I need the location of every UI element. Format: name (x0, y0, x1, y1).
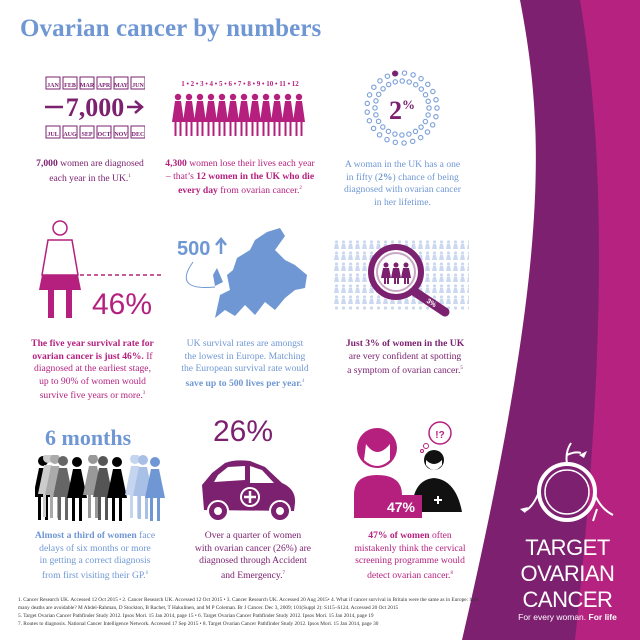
icon: calendar months: JUL (47, 132, 59, 138)
logo: Target Ovarian Cancer (518, 442, 617, 622)
text: deaths: 4,300 women lose their lives each year (165, 158, 315, 169)
text: survival: up to 90% of women would (39, 376, 146, 386)
text: survival: diagnosed at the earliest stage, (34, 363, 151, 374)
icon: ring of dots with 2%: 2 (389, 96, 402, 125)
icon: logo ring (520, 442, 614, 522)
panel: 26% A&E (194, 415, 311, 581)
text: cervical screening: 47% of women often (368, 530, 452, 541)
logo: Target Ovarian Cancer: TARGET (525, 535, 610, 560)
heading: 26%: 26% (213, 415, 273, 448)
icon: twelve women silhouettes (172, 80, 305, 136)
text: delays (35, 530, 155, 581)
icon: ring of dots with 2% (364, 70, 440, 146)
icon: calendar months: FEB (64, 83, 76, 89)
icon: magnifier over crowd: 3% (425, 298, 438, 310)
text: survival (31, 338, 154, 401)
text: A&E (194, 530, 311, 581)
text: UK survival: save up to 500 lives per year.4 (186, 378, 304, 389)
icon: woman and doctor: 47% (387, 499, 416, 515)
text: diagnosed (36, 158, 144, 184)
icon: calendar months: MAY (114, 83, 129, 89)
text: UK survival: UK survival rates are amongst (187, 338, 303, 349)
text: lifetime chance: diagnosed with ovarian cancer (344, 184, 461, 195)
text: diagnosed: each year in the UK.1 (49, 173, 131, 184)
text: UK survival: the lowest in Europe. Matching (185, 350, 305, 362)
icon: magnifier over crowd (334, 240, 469, 316)
text: cervical screening: detect ovarian cancer.8 (367, 570, 453, 581)
text: A&E: and Emergency.7 (221, 570, 285, 581)
icon: calendar months: APR (98, 83, 111, 89)
footnotes: 1. Cancer Research UK. Accessed 12 Oct 2015 • 2. Cancer Research UK. Accessed 12 Oct 2015 • 3. Cancer Research UK. Accessed 20 Aug 2015• 4. What if cancer survival in Britain were the same as in Europe: how many deaths are avoidable? M Abdel-Rahman, D Stockton, B Rachet, T Hakulinen, and M P Coleman. Br J Cancer. Dec 3, 2009; 101(Suppl 2): S115–S124. Accessed 20 Oct 2015 (18, 597, 479, 611)
panel: 7000 diagnosed (36, 76, 145, 184)
text: delays: Almost a third of women face (35, 530, 155, 541)
panel: 46% survival (31, 220, 161, 401)
title: Ovarian cancer by numbers (20, 15, 321, 42)
panel: Europe map (177, 228, 309, 389)
panel: 47% cervical screening (354, 421, 466, 581)
text: survival: survive five years or more.3 (40, 390, 145, 401)
icon: calendar months: DEC (132, 132, 144, 138)
text: 3% confident: are very confident at spotting (349, 350, 461, 362)
icon: woman outline 46% (39, 220, 161, 320)
icon: calendar months: MAR (80, 83, 95, 89)
text: A&E: diagnosed through Accident (199, 555, 307, 566)
icon: calendar months: NOV (114, 132, 128, 138)
panel: 2% chance (344, 70, 461, 208)
text: 3% confident: Just 3% of women in the UK (346, 338, 464, 349)
text: lifetime chance (344, 159, 461, 208)
logo: Target Ovarian Cancer: OVARIAN (521, 561, 614, 586)
icon: twelve women silhouettes: 1 • 2 • 3 • 4 • 5 • 6 • 7 • 8 • 9 • 10 • 11 • 12 (181, 80, 299, 88)
text: 3% confident: a symptom of ovarian cancer.5 (347, 365, 463, 376)
text: UK survival (181, 338, 309, 389)
icon: calendar months (45, 76, 145, 138)
heading: 6 months: 6 months (45, 425, 131, 450)
text: deaths: every day from ovarian cancer.2 (178, 185, 302, 196)
text: cervical screening: screening programme would (355, 555, 465, 566)
text: cervical screening (354, 530, 466, 581)
panel: 6 months delay (35, 425, 165, 581)
logo: Target Ovarian Cancer: CANCER (523, 587, 612, 612)
text: delays: from first visiting their GP.6 (42, 570, 148, 581)
icon: calendar months: AUG (63, 132, 77, 138)
icon: calendar months: SEP (81, 132, 93, 138)
text: cervical screening: mistakenly think the cervical (354, 542, 466, 554)
icon: woman and doctor: !? (435, 430, 445, 441)
text: A&E: Over a quarter of women (205, 530, 301, 541)
icon: Europe map with 500 arrow (177, 228, 307, 318)
text: survival: ovarian cancer is just 46%. If (32, 350, 153, 362)
text: UK survival: the European survival rate would (181, 363, 309, 374)
text: lifetime chance: in fifty (2%) chance of being (346, 172, 459, 182)
icon: women crowd (35, 455, 165, 521)
footnotes: 7. Routes to diagnosis. National Cancer Intelligence Network. Accessed 17 Sep 2015 • 8. Target Ovarian Cancer Pathfinder Study 2012. Ipsos Mori. 15 Jan 2014, page 30 (18, 621, 378, 627)
logo: Target Ovarian Cancer: For every woman. For life (518, 612, 617, 622)
text: diagnosed: 7,000 women are diagnosed (36, 158, 144, 169)
text: lifetime chance: in her lifetime. (374, 196, 431, 208)
icon: calendar months: OCT (97, 132, 111, 138)
icon: calendar months: JUN (132, 83, 144, 89)
text: delays: in getting a correct diagnosis (40, 555, 150, 566)
footnotes: 5. Target Ovarian Cancer Pathfinder Study 2012. Ipsos Mori. 15 Jan 2014, page 15 • 6. Target Ovarian Cancer Pathfinder Study 2012. Ipsos Mori. 15 Jan 2014, page 19 (18, 613, 374, 619)
icon: woman and doctor (354, 421, 462, 518)
text: 3% confident (346, 338, 464, 376)
text: deaths: – that’s 12 women in the UK who die (166, 170, 314, 182)
panel: 3% confident (334, 240, 469, 376)
icon: ring of dots with 2%: % (402, 97, 415, 112)
text: A&E: with ovarian cancer (26%) are (195, 542, 311, 554)
icon: calendar months: 7,000 (66, 93, 124, 122)
icon: Europe map with 500 arrow: 500 (177, 238, 210, 260)
text: survival: The five year survival rate for (31, 338, 154, 349)
text: delays: delays of six months or more (39, 542, 151, 554)
text: lifetime chance: A woman in the UK has a one (345, 159, 460, 170)
panel: 12 women per day (165, 80, 315, 196)
icon: car with cross (202, 460, 296, 520)
text: deaths (165, 158, 315, 196)
footnotes (18, 597, 479, 627)
icon: calendar months: JAN (47, 83, 59, 89)
